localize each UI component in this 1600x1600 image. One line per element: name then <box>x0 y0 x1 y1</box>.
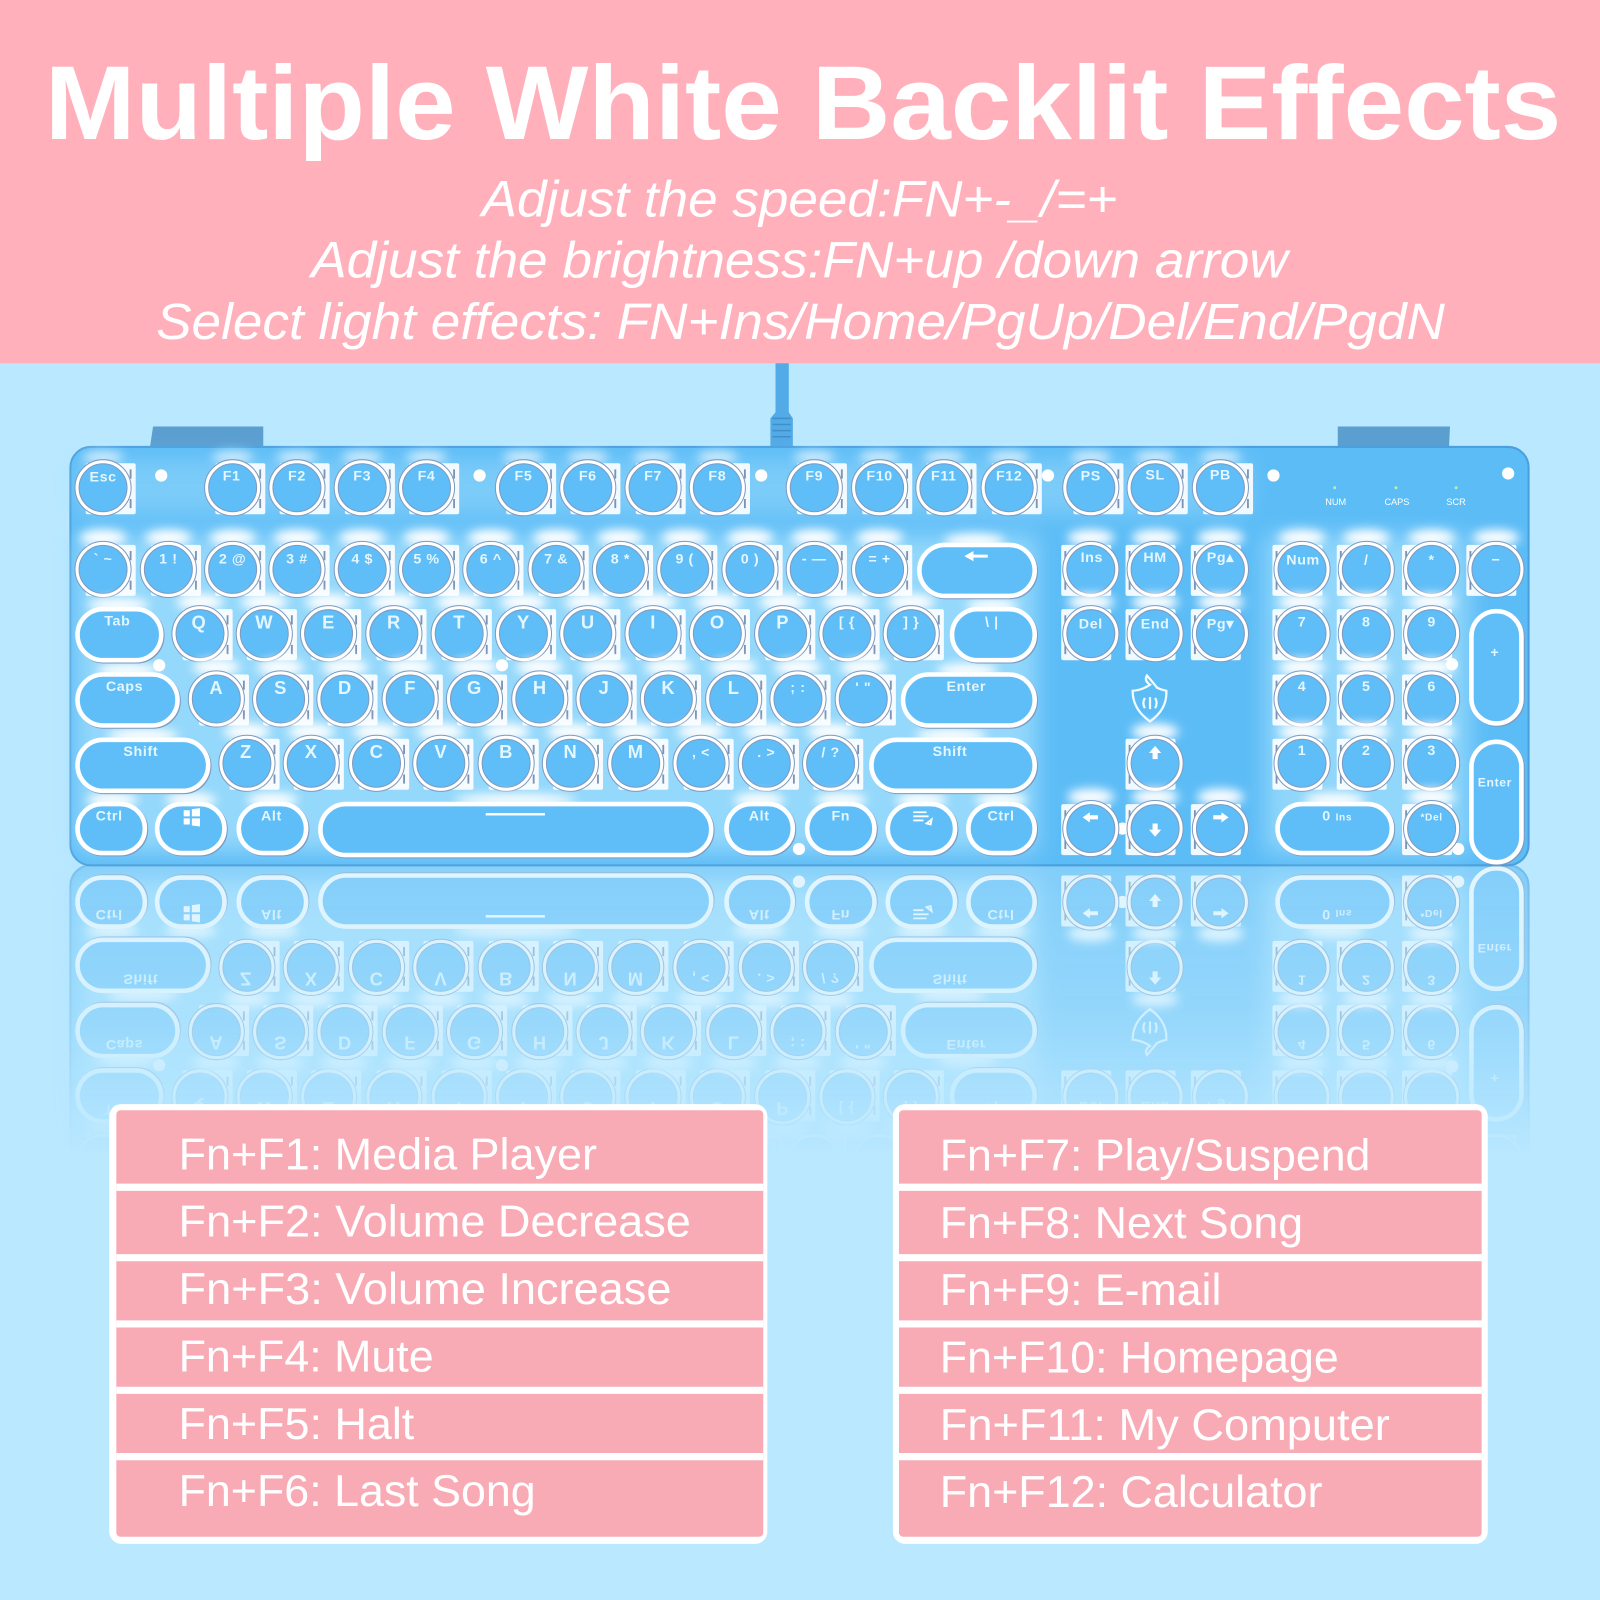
row: F10: Fn+F10: Homepage <box>940 1331 1339 1382</box>
panel: Fn shortcuts F1-F6 <box>109 1104 767 1544</box>
row: F7: Fn+F7: Play/Suspend <box>940 1129 1370 1180</box>
keyboard cable <box>770 363 793 447</box>
lock indicators <box>1325 486 1466 507</box>
subtitle: light effects: Select light effects: FN+Ins/Home/PgUp/Del/End/PgdN <box>156 293 1445 350</box>
lock indicators: NUM <box>1325 497 1346 507</box>
row: F5: Fn+F5: Halt <box>179 1398 415 1449</box>
lock indicators: SCR <box>1446 497 1466 507</box>
row: F11: Fn+F11: My Computer <box>940 1399 1390 1450</box>
row: F4: Fn+F4: Mute <box>179 1330 434 1381</box>
keyboard feet <box>150 427 1450 447</box>
title: Multiple White Backlit Effects <box>45 45 1561 162</box>
lock indicators: CAPS <box>1384 497 1409 507</box>
row: F6: Fn+F6: Last Song <box>179 1465 536 1516</box>
header banner <box>0 0 1600 363</box>
row: F3: Fn+F3: Volume Increase <box>179 1263 671 1314</box>
row: F1: Fn+F1: Media Player <box>179 1128 597 1179</box>
subtitle: brightness: Adjust the brightness:FN+up /down arrow <box>308 232 1291 289</box>
keyboard <box>70 447 1529 865</box>
row: F2: Fn+F2: Volume Decrease <box>179 1196 691 1247</box>
row: F9: Fn+F9: E-mail <box>940 1264 1221 1315</box>
panel: Fn shortcuts F7-F12 <box>893 1104 1488 1544</box>
subtitle: speed: Adjust the speed:FN+-_/=+ <box>479 170 1117 227</box>
row: F8: Fn+F8: Next Song <box>940 1197 1303 1248</box>
keyboard reflection <box>69 865 1530 1128</box>
row: F12: Fn+F12: Calculator <box>940 1466 1322 1517</box>
